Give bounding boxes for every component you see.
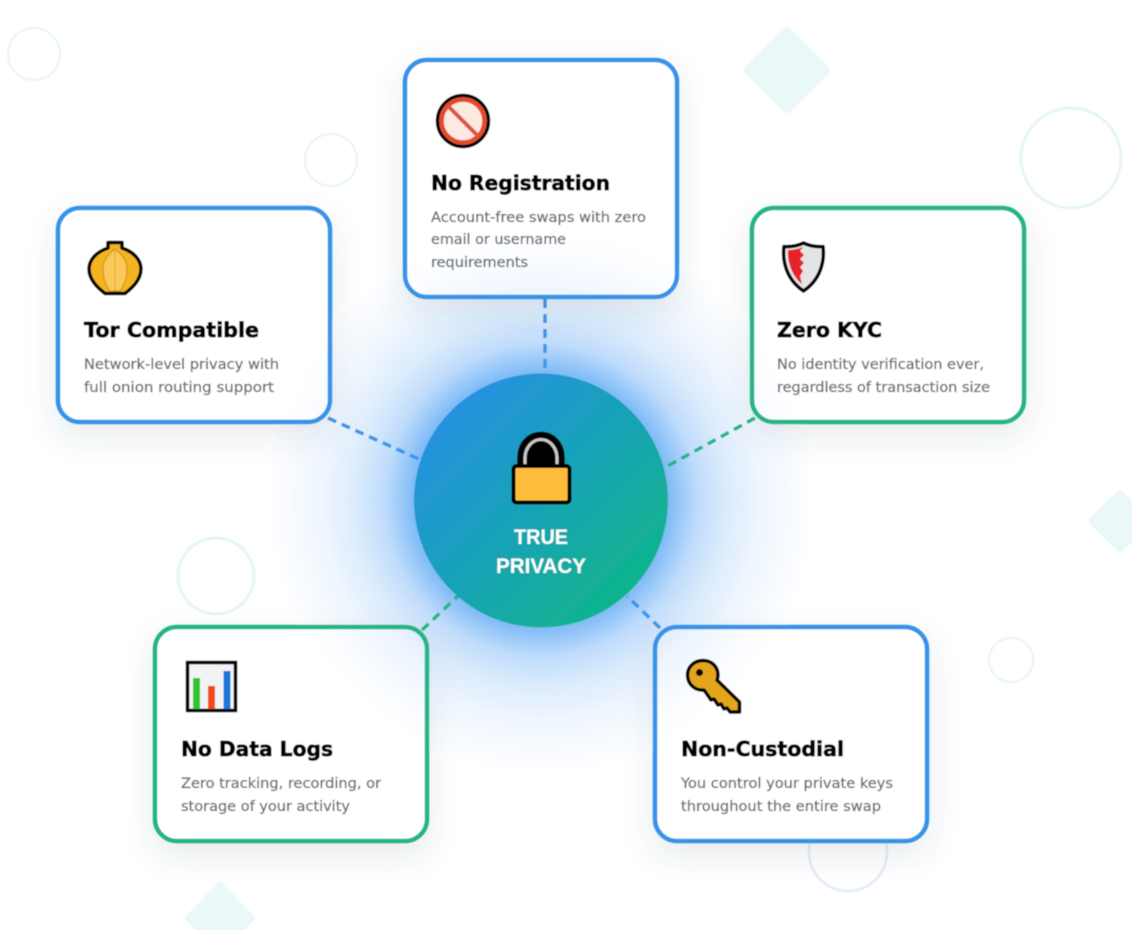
heading: Non-Custodial	[681, 737, 844, 761]
icon: shield	[784, 243, 823, 291]
description: requirements	[431, 255, 528, 271]
icon: bar chart	[188, 662, 236, 710]
heading: No Registration	[431, 171, 610, 195]
description	[777, 357, 990, 396]
description: Network-level privacy with	[84, 357, 279, 373]
central glow	[266, 225, 816, 775]
center label: TRUE	[514, 526, 568, 549]
description: You control your private keys	[680, 776, 893, 792]
panel: No Registration	[405, 60, 677, 297]
description	[680, 776, 893, 815]
description: storage of your activity	[181, 799, 350, 815]
description: regardless of transaction size	[777, 380, 990, 396]
description	[181, 776, 381, 815]
panel: Tor Compatible	[58, 208, 330, 422]
panel: Zero KYC	[752, 208, 1024, 422]
panel: No Data Logs	[155, 627, 427, 841]
description	[84, 357, 279, 396]
icon: key	[688, 660, 740, 712]
panel: Non-Custodial	[655, 627, 927, 841]
description	[431, 210, 646, 271]
description: throughout the entire swap	[681, 799, 881, 815]
heading: No Data Logs	[181, 737, 333, 761]
description: No identity verification ever,	[777, 357, 984, 373]
icon: padlock	[514, 434, 570, 502]
center label: PRIVACY	[496, 555, 586, 578]
icon: onion	[89, 242, 141, 294]
description: Account-free swaps with zero	[431, 210, 646, 226]
icon: prohibited	[438, 96, 488, 146]
connectors	[328, 299, 755, 630]
description: email or username	[431, 232, 566, 248]
heading: Tor Compatible	[84, 318, 259, 342]
description: Zero tracking, recording, or	[181, 776, 381, 792]
heading: Zero KYC	[777, 318, 882, 342]
description: full onion routing support	[84, 380, 275, 396]
center label	[496, 526, 586, 578]
central hub: True Privacy	[414, 374, 668, 628]
